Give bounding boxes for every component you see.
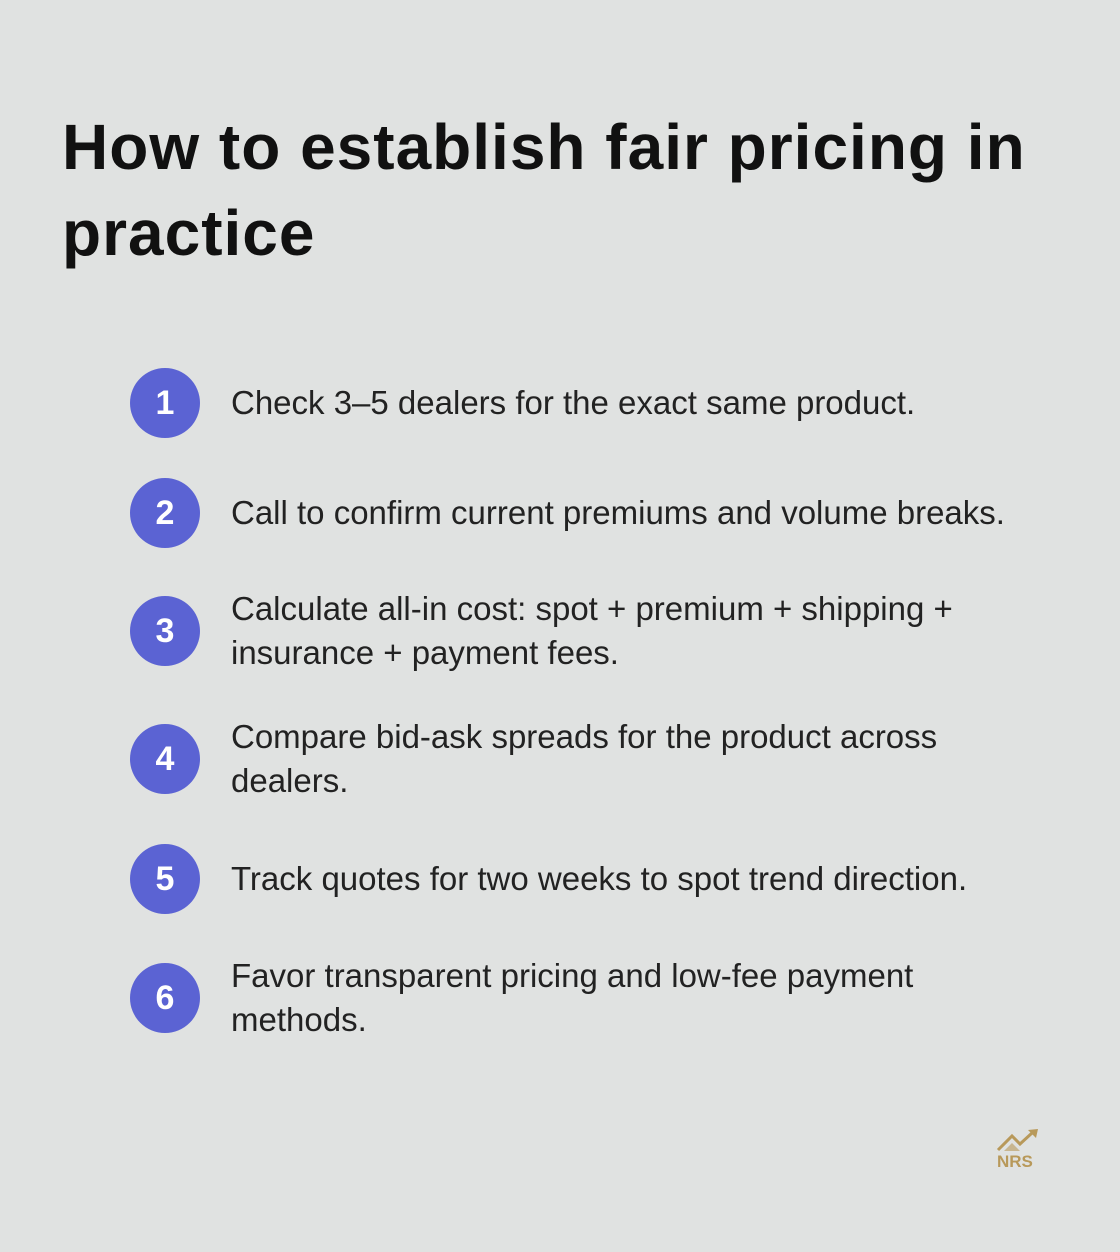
step 2 — [130, 478, 1005, 548]
step 2: Call to confirm current premiums and volume breaks. — [231, 494, 1005, 531]
step 2: 2 — [156, 494, 174, 532]
title: How to establish fair pricing in practice — [62, 111, 1026, 269]
step 5: 5 — [156, 860, 174, 898]
step 6: Favor transparent pricing and low-fee payment methods. — [231, 957, 913, 1038]
step 1: 1 — [156, 384, 174, 422]
step 5 — [130, 844, 967, 914]
step 1 — [130, 368, 915, 438]
step 3: 3 — [156, 612, 174, 650]
step 6: 6 — [156, 979, 174, 1017]
step 4: 4 — [156, 740, 174, 778]
step 4: Compare bid-ask spreads for the product across dealers. — [231, 718, 937, 799]
step 5: Track quotes for two weeks to spot trend direction. — [231, 860, 967, 897]
step 1: Check 3–5 dealers for the exact same product. — [231, 384, 915, 421]
step 3: Calculate all-in cost: spot + premium + shipping + insurance + payment fees. — [231, 590, 953, 671]
logo: NRS — [997, 1129, 1038, 1170]
